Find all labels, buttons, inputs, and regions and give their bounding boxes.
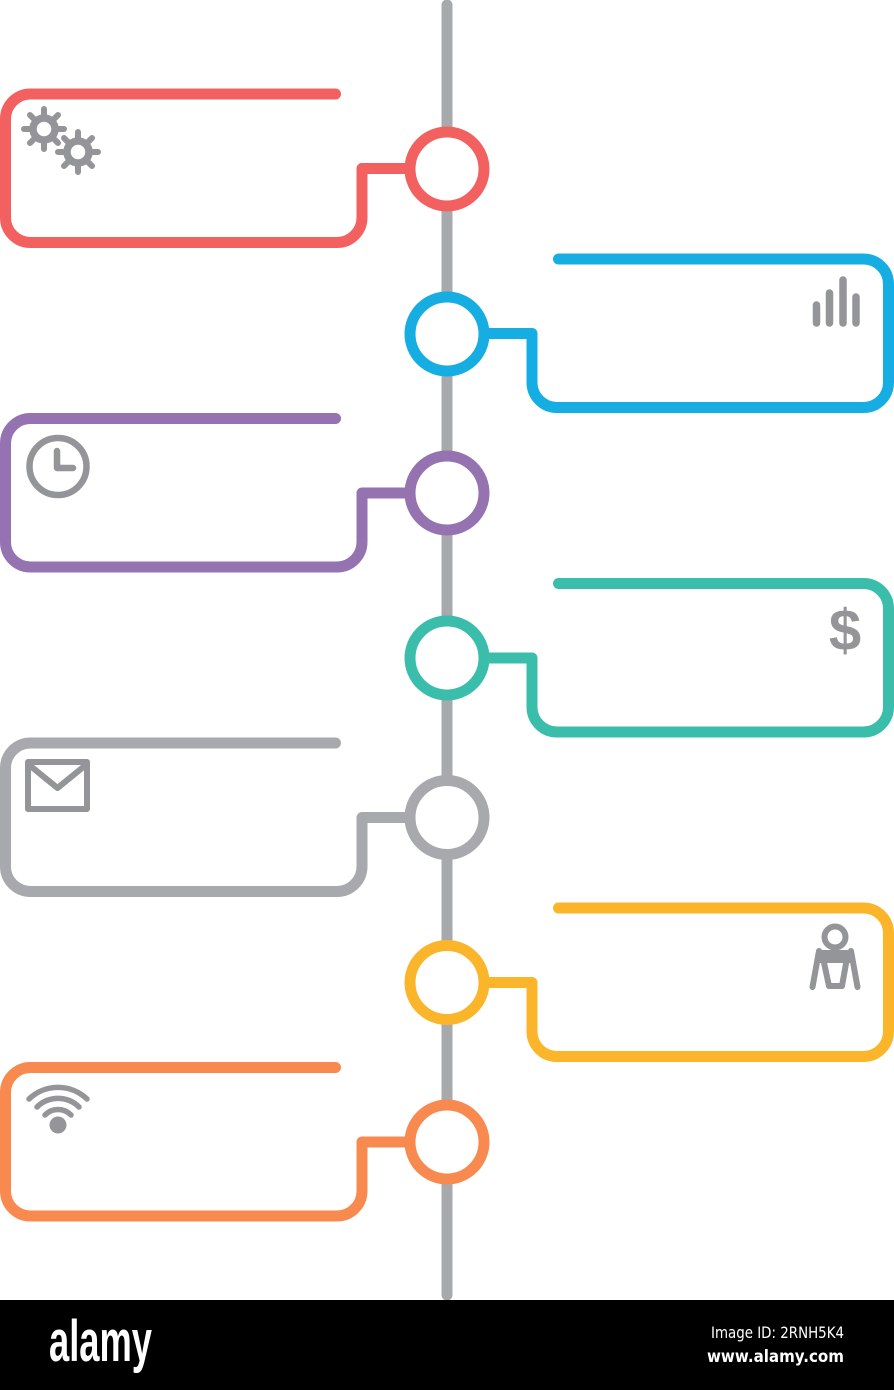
icon: bar chart bbox=[816, 280, 856, 323]
panel: step 3 purple bbox=[6, 418, 484, 567]
watermark footer bar bbox=[0, 1300, 894, 1390]
panel: step 1 red bbox=[6, 94, 484, 242]
panel: step 7 orange bbox=[6, 1068, 484, 1216]
website text: www.alamy.com bbox=[707, 1347, 844, 1367]
icon: person bbox=[812, 926, 858, 987]
image id text: Image ID: 2RNH5K4 bbox=[711, 1323, 844, 1342]
logo text: alamy: alamy bbox=[49, 1309, 152, 1374]
panel: step 2 blue bbox=[410, 259, 888, 408]
icon: wifi bbox=[29, 1087, 87, 1134]
icon: gears bbox=[24, 109, 98, 172]
vertical timeline axis bbox=[442, 5, 452, 1295]
icon: envelope bbox=[28, 762, 87, 809]
panel: step 4 teal bbox=[410, 584, 888, 732]
icon: clock bbox=[30, 438, 86, 495]
icon: dollar sign: $ bbox=[829, 598, 861, 663]
panel: step 6 yellow bbox=[410, 908, 888, 1056]
panel: step 5 grey bbox=[6, 743, 484, 892]
